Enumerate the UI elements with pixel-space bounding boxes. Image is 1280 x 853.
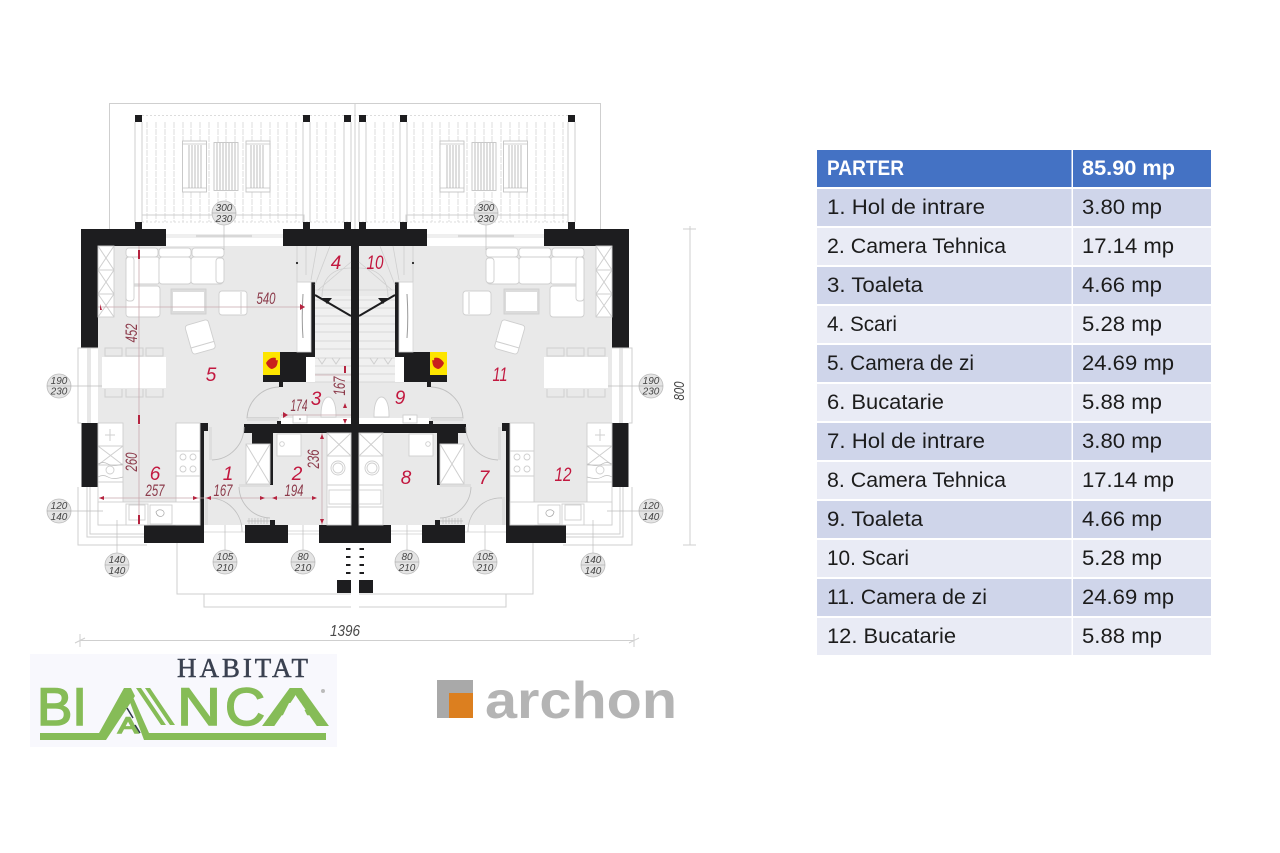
room numbers: 3 xyxy=(311,389,322,410)
opening markers: 230 xyxy=(50,386,68,398)
opening markers: 230 xyxy=(215,214,233,225)
opening markers: 230 xyxy=(642,386,660,398)
opening markers: 230 xyxy=(477,214,495,225)
table rows: 24.69 mp xyxy=(1082,586,1174,609)
room numbers: 11 xyxy=(492,365,508,386)
logo wordmark: BIANCA: N xyxy=(177,678,221,737)
room numbers: 7 xyxy=(479,468,491,489)
opening markers: 80 xyxy=(401,552,413,563)
table rows: 10. Scari xyxy=(827,547,909,570)
table rows: 17.14 mp xyxy=(1082,235,1174,258)
logo: Habitat Bianca xyxy=(30,653,337,747)
interior dimension labels: 194 xyxy=(284,482,304,500)
table rows: 8. Camera Tehnica xyxy=(827,469,1006,492)
table rows: 5. Camera de zi xyxy=(827,352,974,375)
opening markers: 140 xyxy=(585,555,602,566)
table rows: 3.80 mp xyxy=(1082,196,1162,219)
table rows: 5.28 mp xyxy=(1082,547,1162,570)
room numbers: 12 xyxy=(554,465,572,486)
table rows: 12. Bucatarie xyxy=(827,625,956,648)
table rows: 2. Camera Tehnica xyxy=(827,235,1006,258)
table header: PARTER xyxy=(827,157,904,180)
room numbers: 8 xyxy=(401,468,412,489)
opening markers: 120 xyxy=(51,501,68,512)
table rows: 3.80 mp xyxy=(1082,430,1162,453)
opening markers: 190 xyxy=(51,376,68,387)
room numbers: 2 xyxy=(291,464,303,485)
opening markers xyxy=(47,201,663,577)
logo wordmark: HABITAT: HABITAT xyxy=(177,653,308,683)
opening markers: 140 xyxy=(51,512,68,523)
room numbers: 1 xyxy=(223,464,233,485)
interior dimension labels: 167 xyxy=(331,376,349,396)
opening markers: 210 xyxy=(476,563,494,574)
logo wordmark: BIANCA xyxy=(37,678,328,738)
table rows: 3. Toaleta xyxy=(827,274,923,297)
room numbers: 6 xyxy=(150,464,161,485)
opening markers: 140 xyxy=(109,566,126,577)
table rows: 9. Toaleta xyxy=(827,508,923,531)
logo wordmark: BIANCA: C xyxy=(225,678,265,737)
opening markers: 210 xyxy=(398,563,416,574)
opening markers: 300 xyxy=(478,203,495,214)
dimension: total depth: 800 xyxy=(671,381,688,400)
dimension: total width: 1396 xyxy=(330,623,360,640)
logo wordmark: BIANCA: A xyxy=(118,713,138,738)
interior dimension labels: 236 xyxy=(305,449,323,469)
interior dimension labels xyxy=(123,290,349,500)
table rows: 17.14 mp xyxy=(1082,469,1174,492)
opening markers: 80 xyxy=(297,552,309,563)
opening markers: 105 xyxy=(477,552,494,563)
opening markers: 120 xyxy=(643,501,660,512)
opening markers: 210 xyxy=(294,563,312,574)
logo wordmark: BIANCA: BI xyxy=(37,678,87,737)
table rows: 5.88 mp xyxy=(1082,391,1162,414)
opening markers: 140 xyxy=(585,566,602,577)
interior dimension labels: 174 xyxy=(290,397,308,415)
interior dimension labels: 257 xyxy=(145,482,165,500)
opening markers: 140 xyxy=(643,512,660,523)
opening markers: 140 xyxy=(109,555,126,566)
room numbers: 4 xyxy=(331,253,341,274)
opening markers: 210 xyxy=(216,563,234,574)
logo: archon: archon xyxy=(485,672,677,730)
table rows: 4. Scari xyxy=(827,313,897,336)
dimension lines on the plan xyxy=(98,246,351,525)
table rows: 4.66 mp xyxy=(1082,274,1162,297)
interior dimension labels: 540 xyxy=(256,290,276,308)
room numbers xyxy=(150,253,572,489)
opening markers: 190 xyxy=(643,376,660,387)
opening markers: 300 xyxy=(216,203,233,214)
table rows: 1. Hol de intrare xyxy=(827,196,985,219)
room numbers: 10 xyxy=(366,253,384,274)
table rows: 5.28 mp xyxy=(1082,313,1162,336)
table header: 85.90 mp xyxy=(1082,157,1175,180)
opening markers: 105 xyxy=(217,552,234,563)
table rows: 7. Hol de intrare xyxy=(827,430,985,453)
room numbers: 5 xyxy=(206,365,217,386)
interior dimension labels: 167 xyxy=(214,482,233,500)
floor plan: left unit xyxy=(78,104,355,607)
overall dimensions xyxy=(75,226,696,647)
floor plan: right unit (mirrored) xyxy=(355,104,632,607)
interior dimension labels: 452 xyxy=(123,324,141,342)
table rows xyxy=(817,189,1211,655)
interior dimension labels: 260 xyxy=(123,452,141,472)
room numbers: 9 xyxy=(395,388,406,409)
table rows: 6. Bucatarie xyxy=(827,391,944,414)
table rows: 24.69 mp xyxy=(1082,352,1174,375)
table header xyxy=(817,150,1211,187)
table rows: 4.66 mp xyxy=(1082,508,1162,531)
table rows: 5.88 mp xyxy=(1082,625,1162,648)
table rows: 11. Camera de zi xyxy=(827,586,987,609)
table: floor areas xyxy=(817,150,1211,655)
logo wordmark: BIANCA: A xyxy=(264,678,328,737)
